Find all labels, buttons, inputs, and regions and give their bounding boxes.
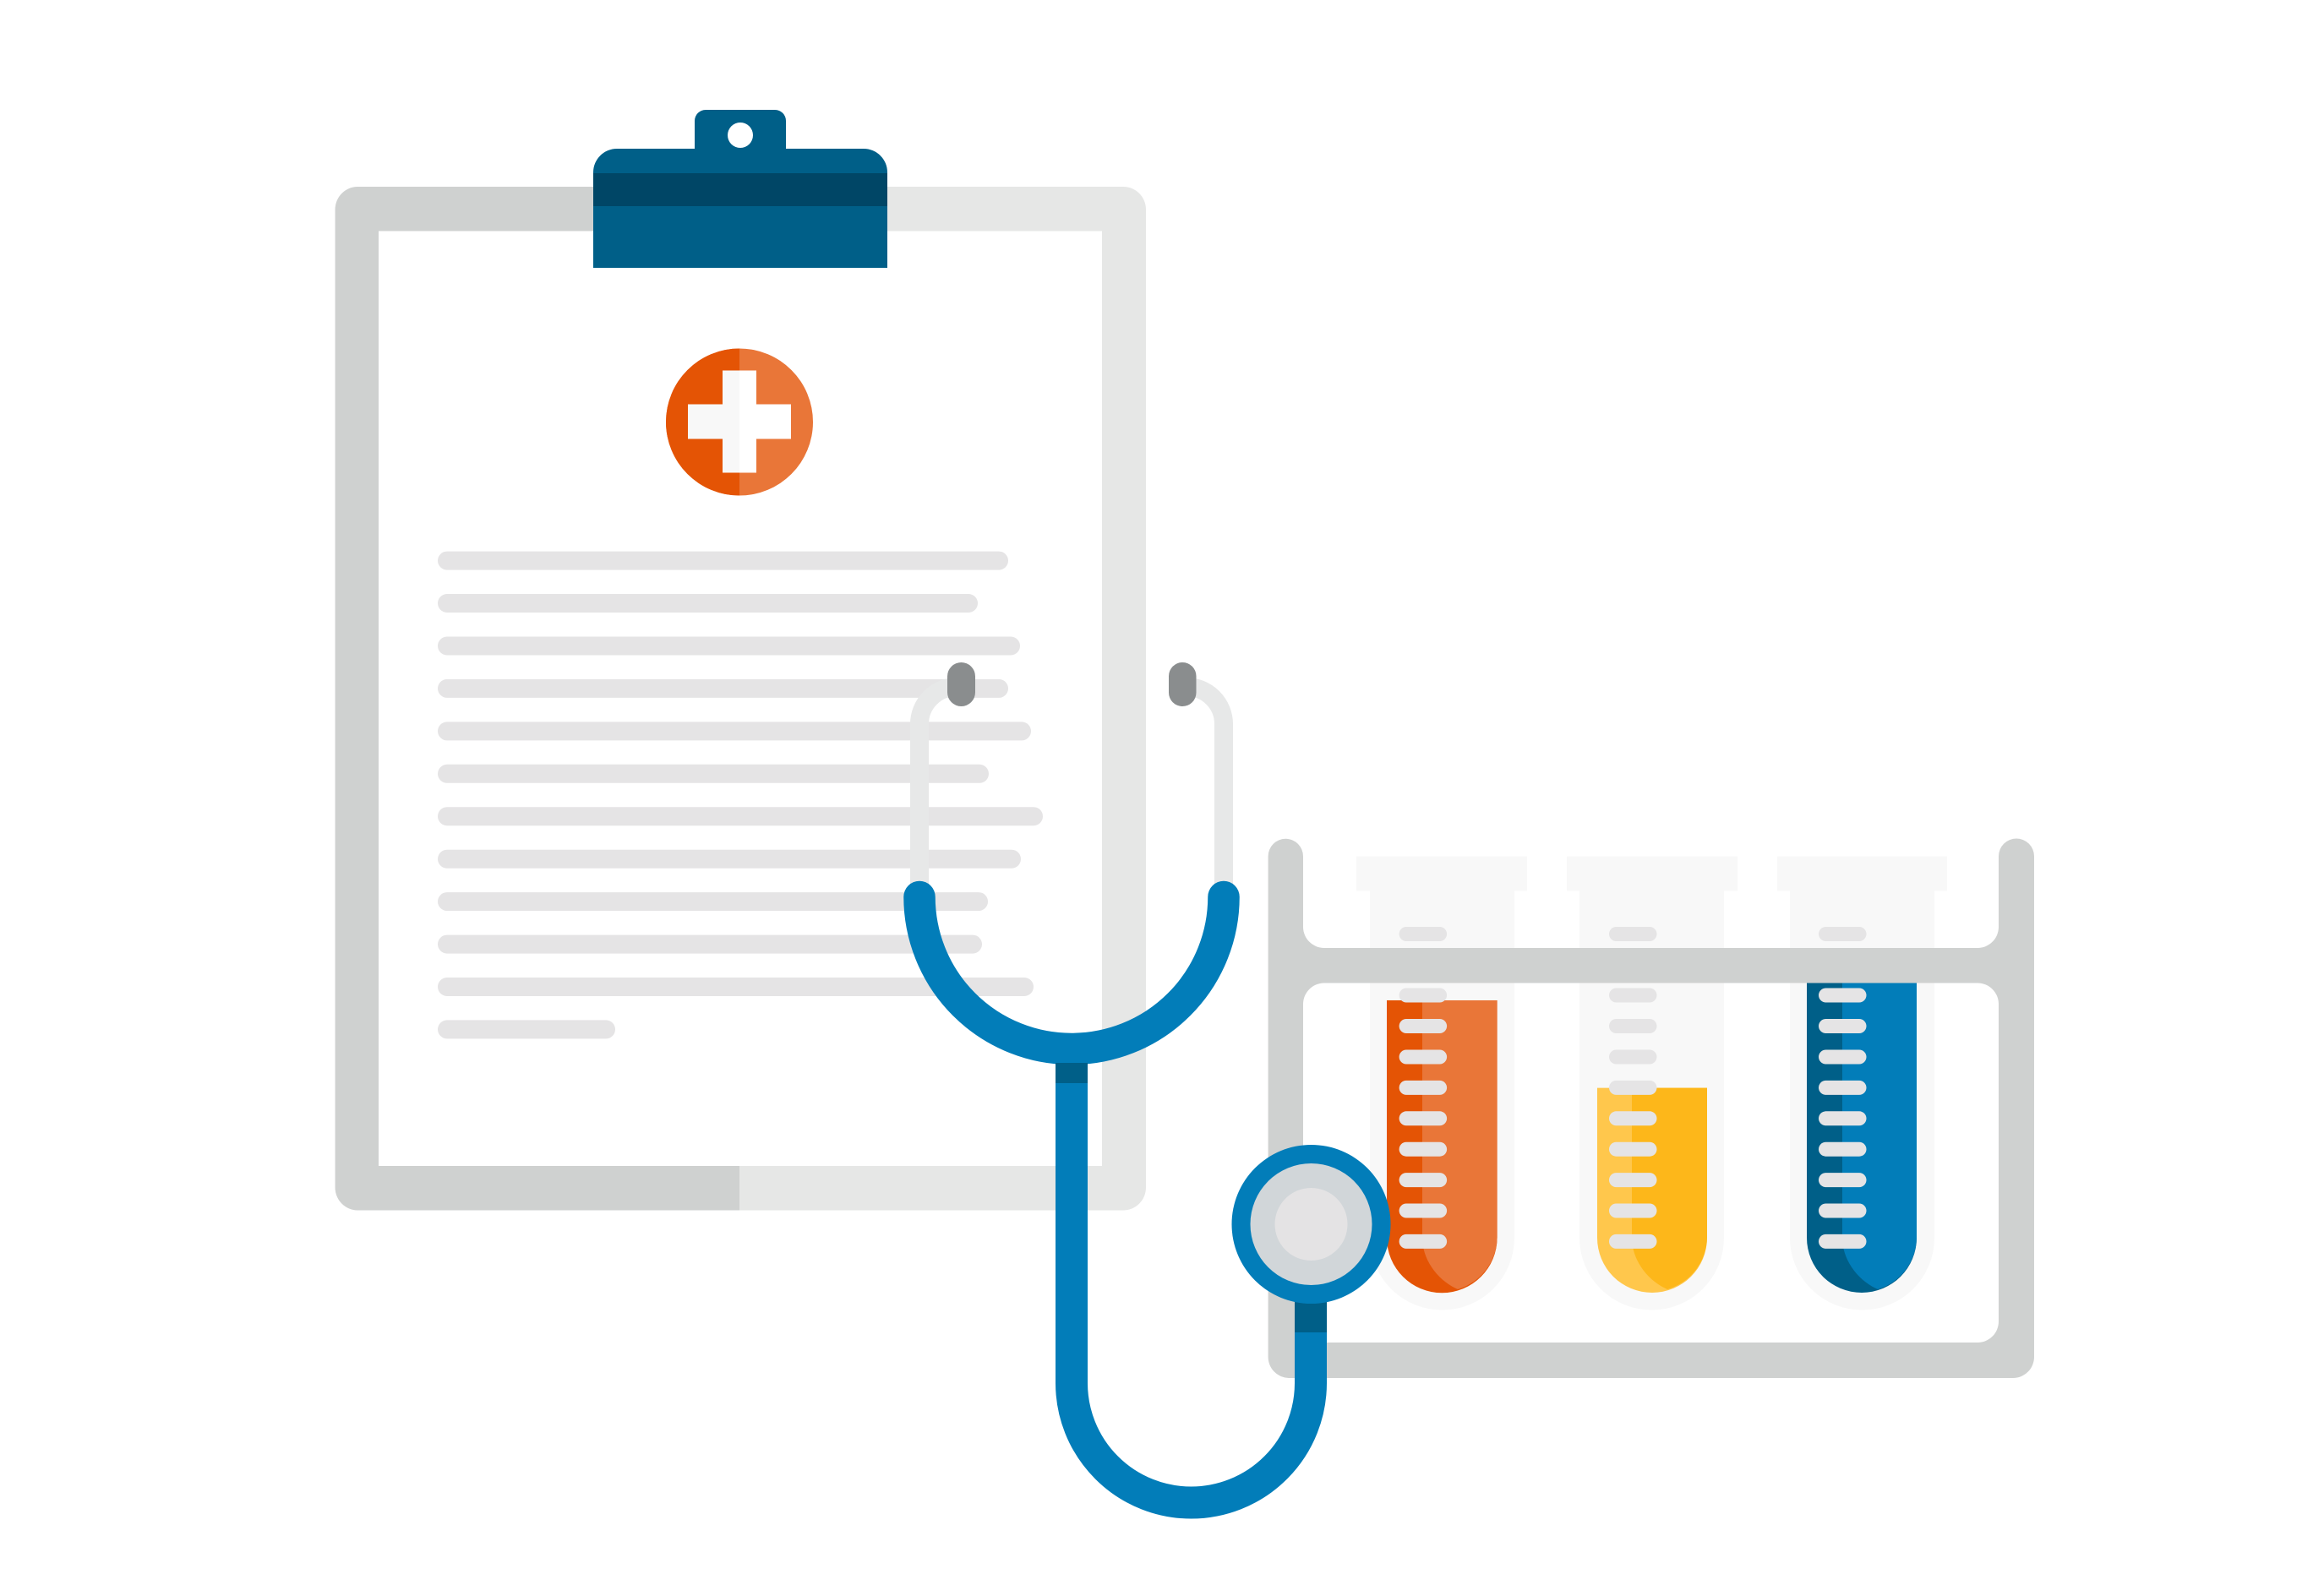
- ear tubes: [919, 687, 1224, 897]
- test tube 3 blue: [1777, 857, 1947, 1310]
- dark tube collar left: [1056, 1063, 1088, 1083]
- blue headset arc: [919, 897, 1224, 1049]
- clipboard clip: [593, 110, 887, 268]
- stethoscope: [919, 662, 1391, 1502]
- test tube 1 orange: [1356, 857, 1527, 1310]
- earpieces: [947, 662, 1197, 706]
- medical cross badge: [666, 348, 813, 495]
- rack frame: [1268, 838, 2034, 1378]
- clipboard board: [336, 187, 1146, 1210]
- test tube 2 yellow: [1567, 857, 1738, 1310]
- document text lines: [438, 552, 1043, 1038]
- test tube rack with tubes: [1268, 838, 2034, 1378]
- chest piece: [1232, 1145, 1391, 1304]
- dark tube collar right: [1295, 1293, 1327, 1332]
- clipboard: [336, 110, 1146, 1210]
- main tube: [1072, 1060, 1311, 1502]
